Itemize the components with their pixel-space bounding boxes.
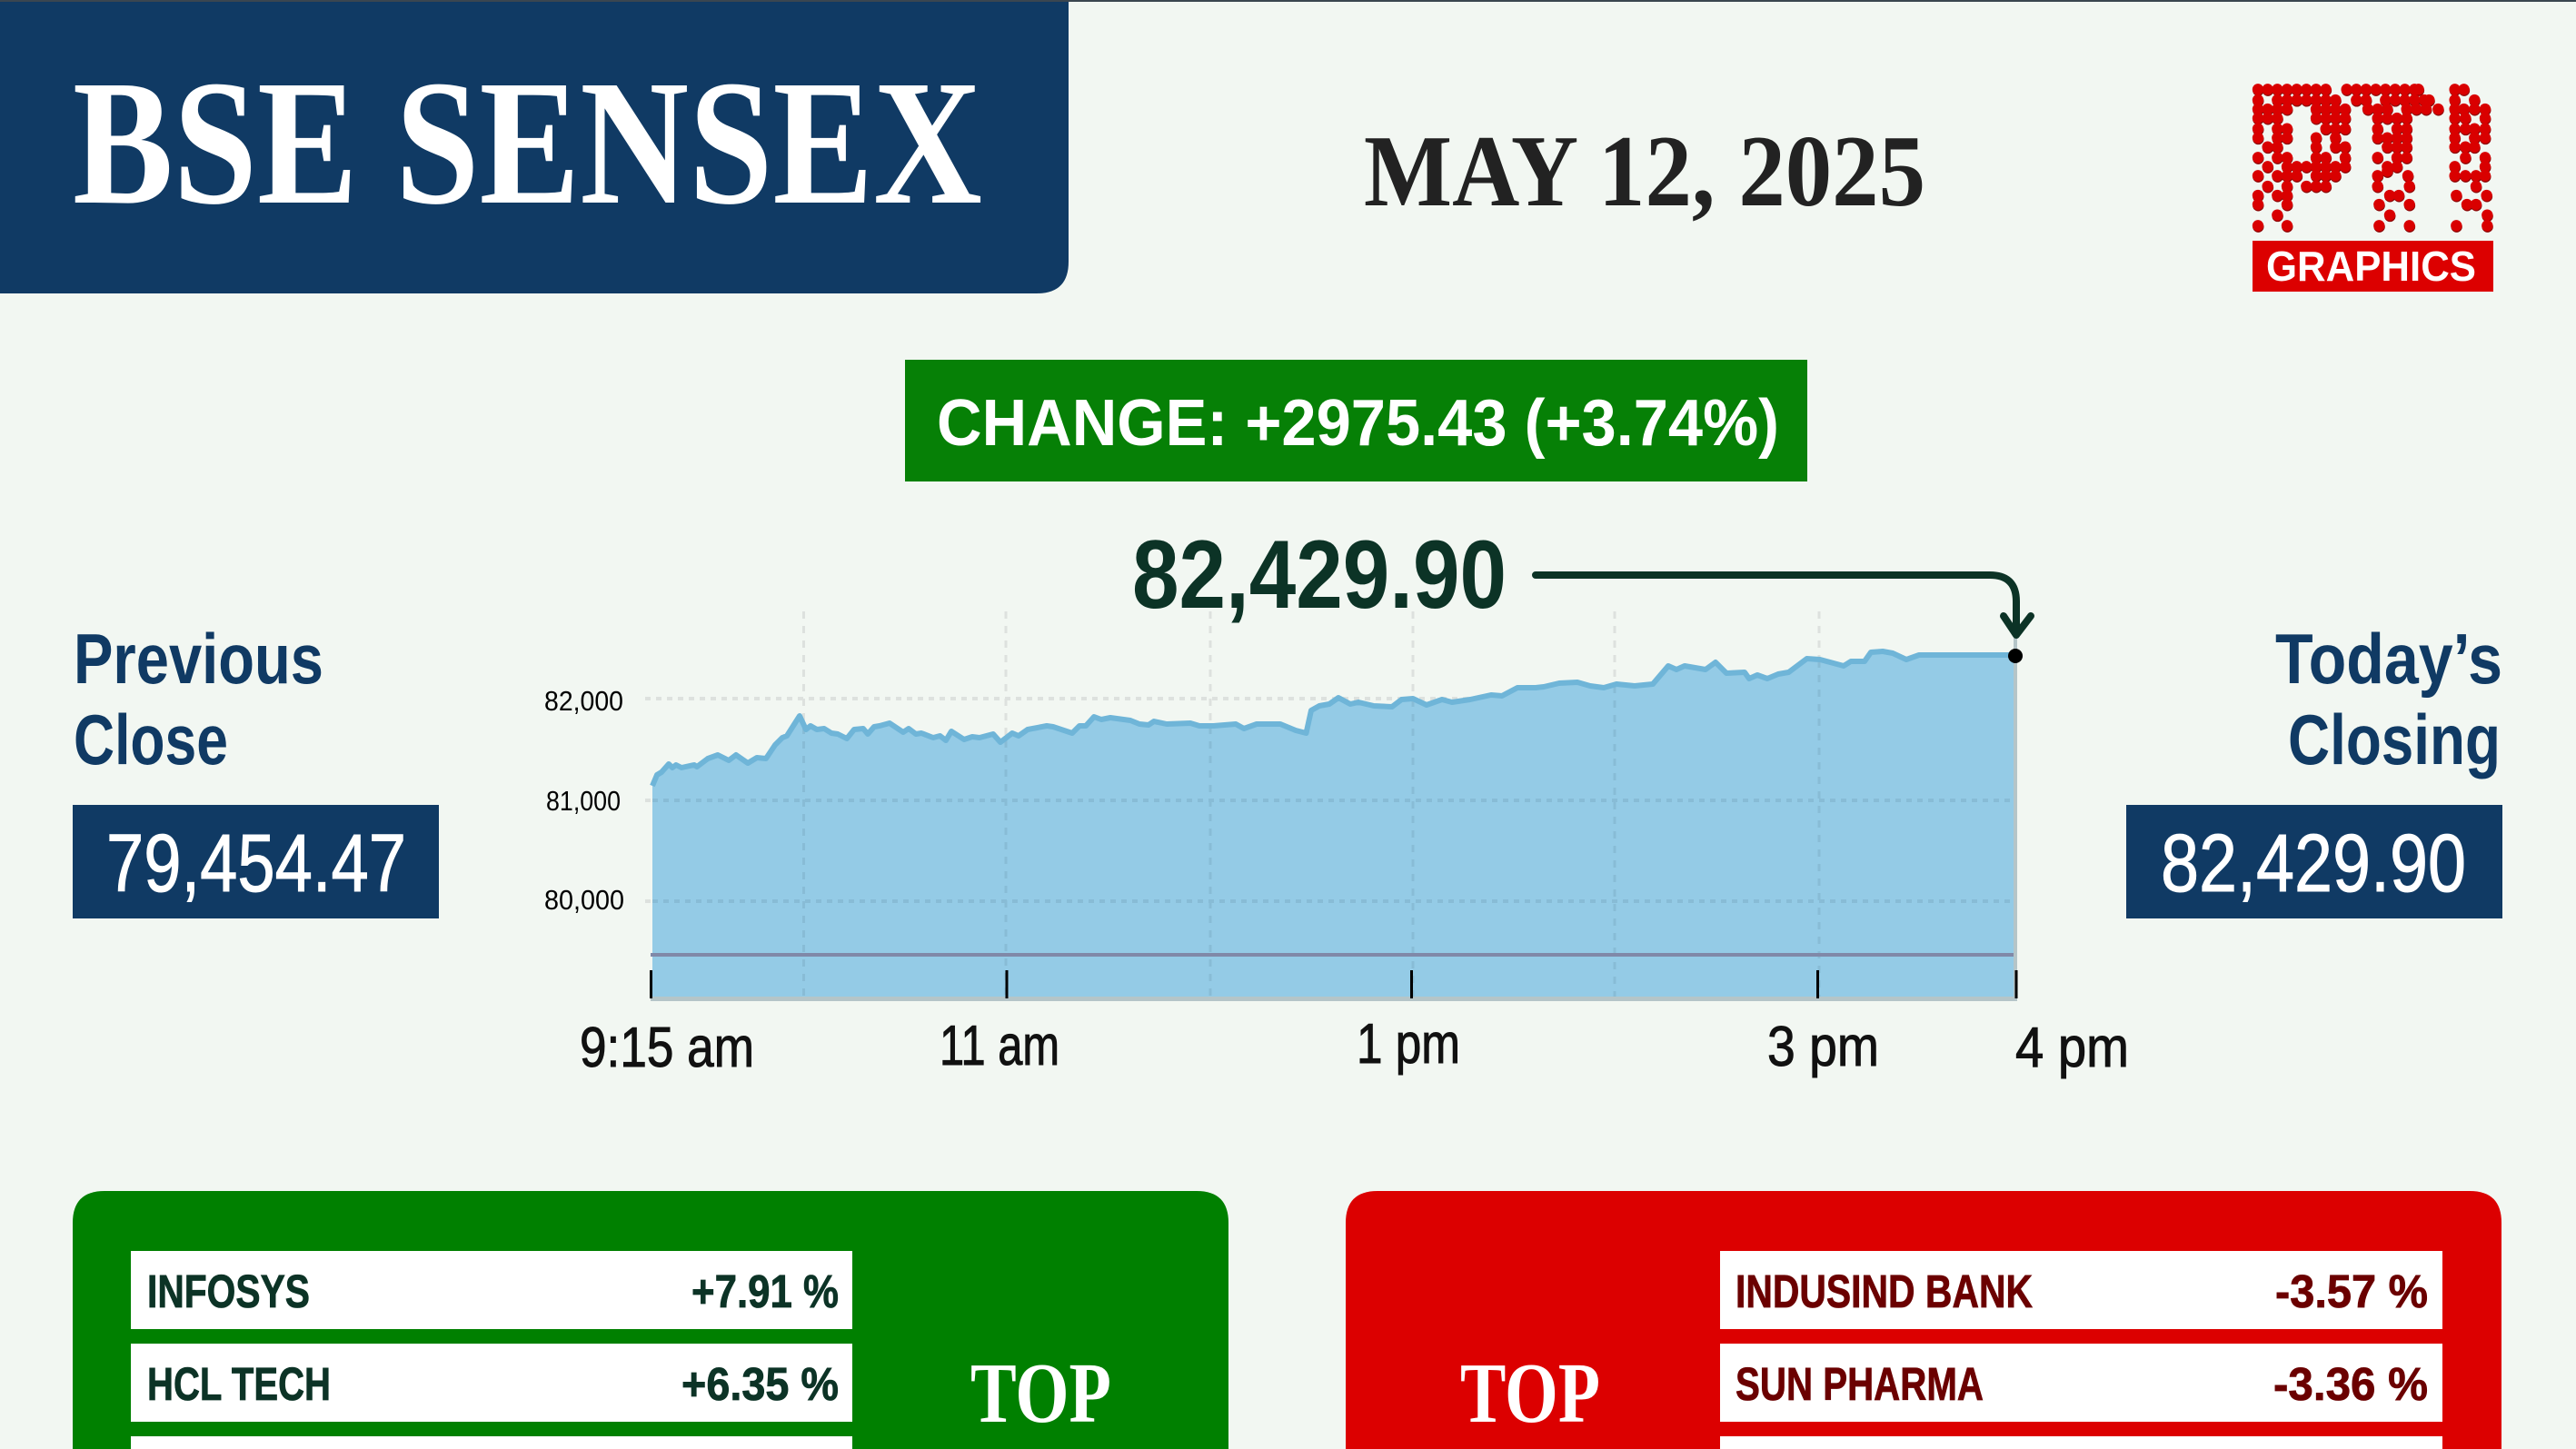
change text: CHANGE: +2975.43 (+3.74%) bbox=[937, 387, 1779, 460]
previous close block bbox=[73, 619, 439, 918]
gainer row: Infosys: INFOSYS bbox=[147, 1265, 310, 1317]
y-axis labels: 80,000 bbox=[544, 884, 624, 916]
arrow from value to end point bbox=[1536, 575, 2031, 635]
x-axis ticks bbox=[651, 970, 2016, 998]
area top line bbox=[652, 651, 2015, 786]
y-axis labels: 82,000 bbox=[544, 685, 623, 717]
loser row: Sun Pharma: SUN PHARMA bbox=[1736, 1358, 1984, 1410]
today's closing label: Closing bbox=[2288, 700, 2501, 779]
logo: PTI Graphics bbox=[2253, 89, 2493, 292]
closing value callout: 82,429.90 bbox=[1132, 520, 1507, 629]
loser row: third (cropped) bbox=[1720, 1436, 2442, 1449]
y-axis labels bbox=[544, 685, 624, 916]
logo label text: GRAPHICS bbox=[2266, 243, 2476, 290]
today's closing label: Today’s bbox=[2275, 619, 2502, 699]
gainers heading: TOP bbox=[970, 1346, 1111, 1441]
previous close label: Close bbox=[74, 700, 228, 779]
gainer row: Infosys bbox=[131, 1251, 852, 1329]
chart baseline bbox=[651, 997, 2017, 1001]
x-axis labels: 4 pm bbox=[2015, 1017, 2129, 1079]
header banner with title bbox=[0, 2, 1069, 293]
loser row: IndusInd Bank: -3.57 % bbox=[2275, 1265, 2428, 1317]
loser row: IndusInd Bank: INDUSIND BANK bbox=[1736, 1265, 2033, 1317]
x-axis labels: 1 pm bbox=[1357, 1013, 1460, 1076]
area chart bbox=[544, 611, 2129, 1079]
gainer row: HCL Tech: +6.35 % bbox=[681, 1358, 839, 1410]
change badge bbox=[905, 360, 1807, 481]
gainer row: Infosys: +7.91 % bbox=[691, 1265, 839, 1317]
date: MAY 12, 2025 bbox=[1364, 115, 1925, 228]
loser row: Sun Pharma bbox=[1720, 1344, 2442, 1422]
previous close reference line bbox=[651, 953, 2017, 957]
gainer row: third (cropped) bbox=[131, 1436, 852, 1449]
today's closing value box bbox=[2126, 805, 2502, 918]
loser row: IndusInd Bank bbox=[1720, 1251, 2442, 1329]
previous close value: 79,454.47 bbox=[106, 819, 406, 909]
today's closing block bbox=[2126, 619, 2502, 918]
end point dot bbox=[2008, 649, 2023, 663]
right edge line bbox=[2014, 636, 2017, 999]
gridlines over area bbox=[652, 660, 2015, 997]
logo label bar bbox=[2253, 241, 2493, 292]
gainer row: HCL Tech bbox=[131, 1344, 852, 1422]
x-axis labels: 11 am bbox=[940, 1015, 1059, 1077]
previous close label: Previous bbox=[74, 619, 323, 699]
panel: top losers bbox=[1346, 1191, 2501, 1449]
area fill bbox=[652, 651, 2015, 997]
losers heading: TOP bbox=[1460, 1346, 1600, 1441]
gainer row: HCL Tech: HCL TECH bbox=[147, 1358, 331, 1410]
y-axis labels: 81,000 bbox=[546, 785, 621, 817]
x-axis labels: 3 pm bbox=[1767, 1016, 1879, 1078]
today's closing value: 82,429.90 bbox=[2161, 819, 2466, 909]
panel: top gainers bbox=[73, 1191, 1228, 1449]
loser row: Sun Pharma: -3.36 % bbox=[2273, 1358, 2428, 1410]
gridlines above area bbox=[645, 611, 2015, 997]
title: BSE SENSEX bbox=[73, 43, 982, 242]
x-axis labels: 9:15 am bbox=[580, 1017, 754, 1079]
logo dots bbox=[2258, 89, 2488, 227]
x-axis labels bbox=[580, 1013, 2129, 1079]
previous close value box bbox=[73, 805, 439, 918]
